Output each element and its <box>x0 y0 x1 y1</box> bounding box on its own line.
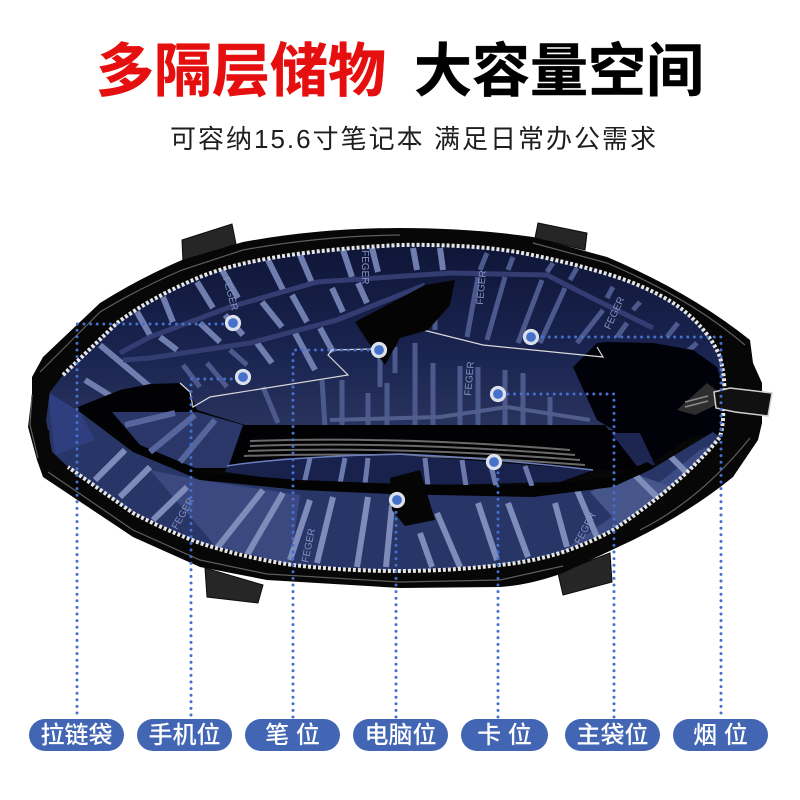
pill: laptop slot <box>353 719 448 751</box>
black shadow left <box>78 383 640 470</box>
lining logos: FEGER <box>475 270 489 305</box>
pill: zipper pocket <box>29 719 124 751</box>
pill: pen slot: 笔 位 <box>265 722 320 749</box>
back wall stripes: bright upper <box>85 248 443 405</box>
bag photo <box>28 223 772 603</box>
lining logos: FEGER <box>603 295 627 331</box>
lining logos: FEGER <box>170 496 197 532</box>
pill: main pocket <box>565 719 660 751</box>
lining logos <box>170 250 627 564</box>
pill: card slot: 卡 位 <box>477 722 532 749</box>
lining back wall <box>40 240 740 575</box>
handle stubs <box>182 223 612 603</box>
title: black part: 大容量空间 <box>414 39 704 104</box>
inner slip pocket <box>225 455 593 486</box>
pill: phone slot: 手机位 <box>148 722 220 749</box>
back wall horizontal bands <box>330 407 590 420</box>
bag outer shell <box>28 228 762 588</box>
callout dots <box>226 316 538 506</box>
lining logos: FEGER <box>220 276 240 312</box>
blue cloth left middle <box>112 412 243 468</box>
pocket zip lines <box>120 273 653 360</box>
mesh pocket stripes <box>244 440 585 465</box>
shell edge highlights <box>30 235 750 582</box>
pill: laptop slot: 电脑位 <box>364 722 436 749</box>
lining logos: FEGER <box>300 528 318 564</box>
pen slit edges <box>180 328 603 407</box>
pill: main pocket: 主袋位 <box>576 722 648 749</box>
black shadow right <box>573 342 724 430</box>
pill: cigarette slot <box>673 719 768 751</box>
label pills <box>29 719 768 751</box>
subtitle: daily use: 满足日常办公需求 <box>434 124 658 154</box>
subtitle: capacity: 可容纳15.6寸笔记本 <box>170 124 425 154</box>
pill: cigarette slot: 烟 位 <box>693 722 748 749</box>
back wall stripes: dim lower and right <box>183 253 697 427</box>
zipper <box>63 245 724 571</box>
zipper pull <box>677 383 772 416</box>
pill: pen slot <box>245 719 340 751</box>
divider band <box>78 407 652 487</box>
title <box>96 39 704 104</box>
lining logos: FEGER <box>463 361 477 396</box>
pill: zipper pocket: 拉链袋 <box>40 722 112 749</box>
pill: phone slot <box>137 719 232 751</box>
pill: card slot <box>461 719 548 751</box>
lining logos: FEGER <box>573 511 599 546</box>
front black tab <box>390 470 435 526</box>
front pocket stripes <box>95 450 687 567</box>
dotted leader lines <box>77 324 721 717</box>
title: red part: 多隔层储物 <box>96 39 386 104</box>
front pocket <box>48 393 720 571</box>
subtitle <box>170 124 658 154</box>
dim lining under shadow <box>611 433 655 466</box>
lining logos: FEGER <box>359 250 370 284</box>
black pocket tab <box>355 280 455 365</box>
